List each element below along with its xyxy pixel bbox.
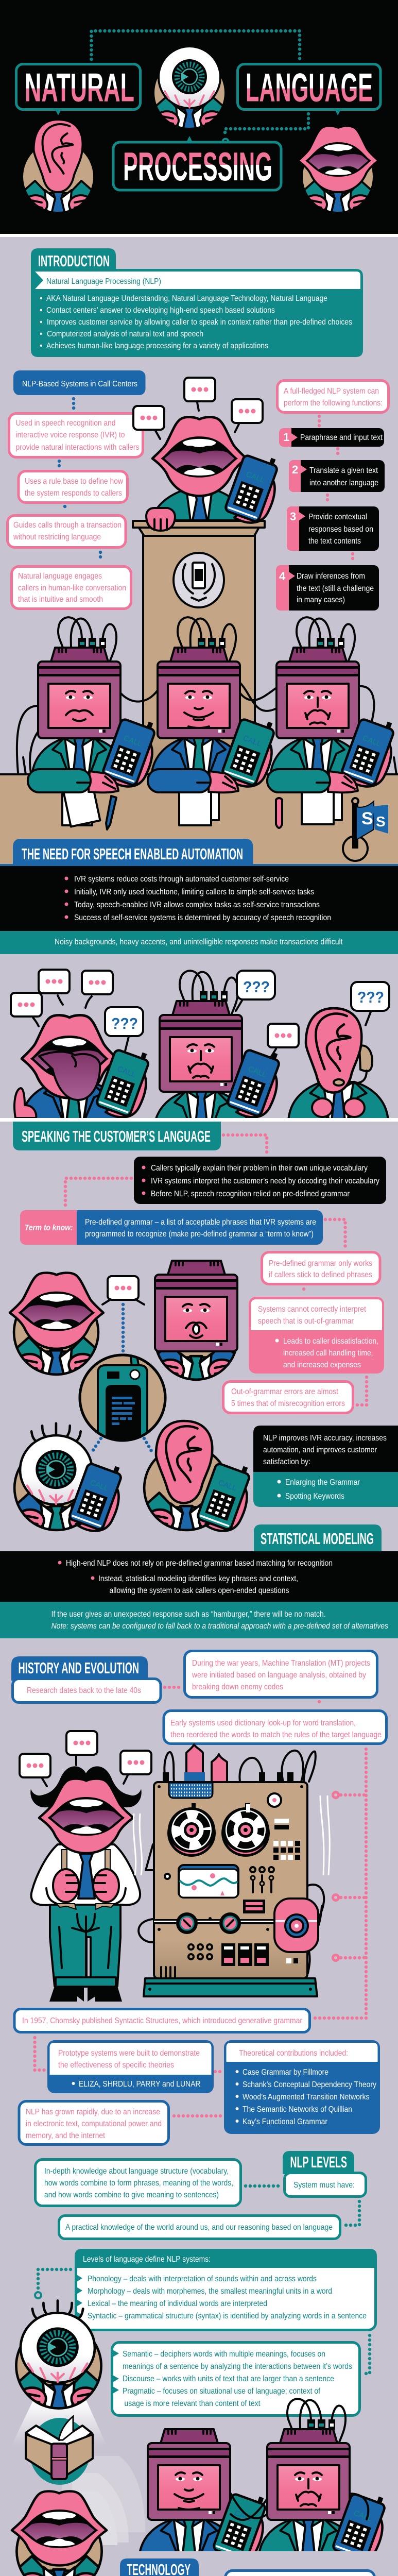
step 1: 1 <box>283 431 289 444</box>
panel: NLP-based systems in call centers: the system responds to callers <box>25 489 122 498</box>
box: levels of language <box>75 2249 377 2330</box>
panel: introduction: • <box>40 294 43 303</box>
box: Chomsky 1957 <box>14 2009 310 2032</box>
side wires <box>139 1844 324 1973</box>
icon: open book <box>26 2416 93 2485</box>
panel: NLP-based systems in call centers: provide natural interactions with callers <box>15 443 139 452</box>
panel: NLP-based systems in call centers <box>7 370 164 609</box>
controls <box>165 1793 300 1913</box>
panel: need for speech automation bullets: Success of self-service systems is determined by accuracy of speech recognition <box>74 913 331 922</box>
panel: introduction: Contact centers’ answer to developing high-end speech based solutions <box>46 306 275 315</box>
oscilloscope screen <box>179 1865 238 1897</box>
speaker body <box>152 489 247 520</box>
panel: NLP levels: how words combine to form phrases, meaning of the words, <box>44 2179 233 2188</box>
step 1: Paraphrase and input text <box>300 433 383 442</box>
heading: the need for speech enabled automation <box>13 839 253 864</box>
panel: NLP levels: and how words combine to give meaning to sentences) <box>44 2191 219 2199</box>
figure: monitor persons lower: CALL <box>353 2509 373 2523</box>
speech bubbles: history <box>20 1731 151 1786</box>
step 3 <box>287 506 379 551</box>
box: systems cannot interpret: speech that is out-of-grammar <box>258 1317 354 1326</box>
title: Natural Language Processing: NATURAL <box>25 65 134 110</box>
step 4: the text (still a challenge <box>297 584 374 593</box>
reels <box>167 1803 270 1857</box>
title: Natural Language Processing <box>16 31 380 190</box>
panel: NLP-based systems in call centers: NLP-Based Systems in Call Centers <box>22 380 137 388</box>
callout: hamburger note: If the user gives an unexpected response such as “hamburger,” there will be no match. <box>51 1610 326 1619</box>
panel: NLP improves IVR accuracy: automation, and improves customer <box>263 1446 377 1454</box>
box: levels of language: Lexical – the meaning of individual words are interpreted <box>88 2299 267 2308</box>
icon: SAS flag: S <box>361 809 373 828</box>
panel: statistical modeling bullets <box>0 1551 398 1602</box>
box: NLP has grown rapidly: memory, and the internet <box>26 2131 105 2140</box>
panel: introduction: Natural Language Processing (NLP) <box>46 277 161 286</box>
box: prototype systems <box>47 2040 214 2093</box>
box: Chomsky 1957: In 1957, Chomsky published Syntactic Structures, which introduced generative grammar <box>22 2016 303 2025</box>
icon: eye person <box>152 46 227 130</box>
box: out of grammar errors: Out-of-grammar errors are almost <box>231 1387 338 1396</box>
panel: statistical modeling bullets: High-end NLP does not rely on pre-defined grammar based matching for recognition <box>66 1559 333 1568</box>
figure: ear person <box>143 1421 258 1537</box>
figure: confused monitor: CALL <box>247 1064 268 1079</box>
panel: functions of a full NLP system <box>276 380 388 611</box>
box: levels of language: Levels of language define NLP systems: <box>83 2255 211 2264</box>
panel: NLP-based systems in call centers: Guides calls through a transaction <box>13 521 122 530</box>
speech bubble and connectors <box>93 1276 151 1451</box>
box: pre-defined grammar: Pre-defined grammar only works <box>269 1259 372 1268</box>
icon: pens <box>106 796 282 829</box>
box: levels of language: Morphology – deals with morphemes, the smallest meaningful units in a word <box>88 2287 332 2296</box>
panel: introduction: Achieves human-like language processing for a variety of applications <box>46 342 268 350</box>
figure: monitor persons lower <box>135 2399 398 2569</box>
figure: mouth with tongue <box>14 1015 158 1123</box>
panel: introduction <box>31 248 363 357</box>
box: out of grammar errors: 5 times that of misrecognition errors <box>231 1399 345 1408</box>
panel: need for speech automation bullets: Today, speech-enabled IVR allows complex tasks as self-service transactions <box>74 901 320 909</box>
figure: phone circle <box>80 1355 165 1448</box>
heading: history and evolution: HISTORY AND EVOLUTION <box>19 1659 139 1677</box>
box: pre-defined grammar <box>262 1252 380 1284</box>
machine base <box>144 1978 317 1996</box>
panel: statistical modeling bullets: allowing the system to ask callers open-ended questions <box>109 1586 289 1595</box>
icon: SAS flag: S <box>376 814 386 829</box>
box: theoretical contributions <box>224 2040 380 2134</box>
monitor person 1: CALL <box>123 734 143 749</box>
monitor person 1 <box>32 617 164 792</box>
step 1 <box>279 428 384 447</box>
step 3: Provide contextual <box>308 513 367 521</box>
box: levels of language: Phonology – deals with interpretation of sounds within and across words <box>88 2275 317 2283</box>
podium speaker scene <box>133 417 286 774</box>
box: theoretical contributions: Theoretical contributions included: <box>239 2049 348 2058</box>
callout: term to know: programmed to recognize (make pre-defined grammar a “term to know”) <box>85 1230 314 1239</box>
light beam <box>11 2401 107 2446</box>
step 3: responses based on <box>308 525 373 534</box>
title: Natural Language Processing: PROCESSING <box>123 144 272 189</box>
panel: technology <box>14 2558 387 2576</box>
panel: NLP-based systems in call centers: callers in human-like conversation <box>18 584 126 592</box>
papers and arms on table <box>28 769 358 826</box>
box: systems cannot interpret: increased call handling time, <box>283 1349 373 1358</box>
panel: NLP improves IVR accuracy: Enlarging the Grammar <box>285 1478 360 1487</box>
figure: monitor person <box>154 1261 238 1381</box>
speaker hand <box>146 508 175 531</box>
panel: introduction: • <box>40 306 43 315</box>
box: systems cannot interpret: Leads to caller dissatisfaction, <box>283 1337 378 1346</box>
panel: NLP improves IVR accuracy: satisfaction by: <box>263 1458 310 1466</box>
callout: term to know <box>20 1210 323 1245</box>
heading: the need for speech enabled automation: THE NEED FOR SPEECH ENABLED AUTOMATION <box>22 845 243 863</box>
panel: functions of a full NLP system: perform the following functions: <box>284 399 383 408</box>
panel: history and evolution: During the war years, Machine Translation (MT) projects <box>192 1659 370 1668</box>
figure: mouth person lower <box>12 2492 107 2576</box>
box: theoretical contributions: The Semantic Networks of Quillian <box>243 2105 352 2114</box>
step 4: 4 <box>279 570 286 583</box>
box: theoretical contributions: Kay’s Functional Grammar <box>243 2117 328 2126</box>
connectors: timeline dots <box>314 1749 366 2018</box>
panel: NLP levels: System must have: <box>293 2181 355 2190</box>
box: out of grammar errors <box>223 1382 353 1413</box>
figure: monitor persons lower: CALL <box>233 2509 254 2523</box>
figure: eye person <box>15 2300 102 2410</box>
panel: history and evolution: were initiated based on language analysis, obtained by <box>192 1671 366 1680</box>
icon: ear person <box>21 120 95 214</box>
panel: history and evolution: Research dates back to the late 40s <box>27 1686 141 1695</box>
figure: mouth person <box>10 1273 103 1376</box>
box: systems cannot interpret: Systems cannot correctly interpret <box>258 1305 366 1314</box>
icon: SAS flag <box>343 798 388 861</box>
monitor person 3: CALL <box>361 734 382 749</box>
panel: introduction: AKA Natural Language Understanding, Natural Language Technology, Natural Language <box>46 294 327 303</box>
monitor person 2 <box>151 617 283 792</box>
box: prototype systems: the effectiveness of specific theories <box>58 2061 174 2070</box>
box: NLP has grown rapidly <box>19 2101 169 2144</box>
box: systems cannot interpret <box>249 1297 384 1374</box>
box: theoretical contributions: Schank’s Conceptual Dependency Theory <box>243 2080 376 2089</box>
step 4: in many cases) <box>297 596 345 604</box>
figure: confused monitor <box>154 971 288 1128</box>
box: theoretical contributions: Wood’s Augmented Transition Networks <box>243 2093 370 2102</box>
panel: NLP-based systems in call centers: that is intuitive and smooth <box>18 595 103 604</box>
box: prototype systems: ELIZA, SHRDLU, PARRY and LUNAR <box>79 2080 201 2089</box>
box: semantic discourse pragmatic <box>112 2342 359 2415</box>
heading: introduction: INTRODUCTION <box>38 252 110 270</box>
panel: need for speech automation bullets <box>0 866 398 931</box>
callout: term to know: Term to know: <box>25 1224 73 1232</box>
table <box>0 774 398 865</box>
machine wiring and towers <box>163 1744 316 1783</box>
box: semantic discourse pragmatic: Discourse – works with units of text that are larger than a sentence <box>123 2375 334 2383</box>
callout: noisy backgrounds <box>0 931 398 954</box>
box: semantic discourse pragmatic: Semantic – deciphers words with multiple meanings, focuses on <box>123 2350 325 2359</box>
speech bubbles: confusion: ??? <box>111 1014 138 1032</box>
figure: ear with headset <box>288 1008 388 1119</box>
speaker mouth <box>152 417 247 496</box>
box: systems cannot interpret: and increased expenses <box>283 1361 361 1369</box>
step 2: 2 <box>292 463 298 476</box>
lower buttons <box>158 1917 298 1978</box>
heading: speaking the customer's language: SPEAKING THE CUSTOMER’S LANGUAGE <box>22 1127 211 1145</box>
wires between monitors <box>17 683 374 773</box>
speech bubbles: confusion: ??? <box>357 988 384 1006</box>
panel: introduction: Computerized analysis of natural text and speech <box>47 330 203 338</box>
figure: mouth with tongue: CALL <box>116 1064 137 1079</box>
panel: NLP improves IVR accuracy: Spotting Keywords <box>285 1492 344 1501</box>
pink speaker <box>274 1899 318 1952</box>
speech bubbles: confusion <box>11 970 389 1057</box>
box: NLP has grown rapidly: NLP has grown rapidly, due to an increase <box>26 2108 160 2116</box>
panel: NLP-based systems in call centers: Uses a rule base to define how <box>25 477 123 486</box>
heading: speaking the customer's language <box>13 1122 221 1150</box>
podium <box>133 521 265 774</box>
panel: NLP levels: A practical knowledge of the world around us, and our reasoning based on language <box>65 2223 333 2232</box>
step 3: 3 <box>290 510 296 523</box>
panel: introduction: Improves customer service by allowing caller to speak in context rather than pre-defined choices <box>47 318 352 327</box>
box: semantic discourse pragmatic: meanings of a sentence by analyzing the interactions between it’s words <box>123 2362 352 2371</box>
panel: NLP improves IVR accuracy <box>253 1426 398 1507</box>
step 3: the text contents <box>308 537 361 546</box>
panel: callers vocabulary: Before NLP, speech recognition relied on pre-defined grammar <box>151 1190 350 1198</box>
podium emblem <box>174 553 224 607</box>
step 4: Draw inferences from <box>297 572 365 581</box>
callout: hamburger note <box>0 1602 398 1638</box>
speech bubbles <box>133 378 263 439</box>
panel: callers vocabulary <box>134 1157 386 1204</box>
panel: NLP-based systems in call centers: Natural language engages <box>18 572 102 581</box>
monitor person 2: CALL <box>242 734 263 749</box>
box: semantic discourse pragmatic: usage is more relevant than content of text <box>125 2399 261 2408</box>
speaker phone <box>223 449 286 529</box>
header band <box>0 0 398 234</box>
panel: history and evolution: Early systems used dictionary look-up for word translation, <box>170 1719 356 1727</box>
panel: need for speech automation bullets: IVR systems reduce costs through automated customer self-service <box>74 875 289 884</box>
speech bubbles: confusion: ??? <box>243 978 270 996</box>
panel: NLP-based systems in call centers: Used in speech recognition and <box>15 419 115 428</box>
callout: noisy backgrounds: Noisy backgrounds, heavy accents, and unintelligible responses make transactions difficult <box>55 938 343 946</box>
sound waves from mouth <box>62 2456 145 2545</box>
step 2 <box>289 460 385 492</box>
figure: ear person: CALL <box>217 1478 238 1493</box>
box: NLP has grown rapidly: in electronic text, computational power and <box>26 2120 162 2128</box>
panel: history and evolution <box>11 1651 386 1743</box>
panel: NLP-based systems in call centers: interactive voice response (IVR) to <box>15 431 125 439</box>
figure: eye person: CALL <box>89 1478 110 1493</box>
box: prototype systems: Prototype systems were built to demonstrate <box>58 2049 200 2058</box>
panel: statistical modeling bullets: Instead, statistical modeling identifies key phrases and context, <box>98 1574 298 1583</box>
box: semantic discourse pragmatic: Pragmatic – focuses on situational use of language; context of <box>123 2387 320 2396</box>
heading: statistical modeling <box>254 1524 382 1551</box>
panel: NLP levels: In-depth knowledge about language structure (vocabulary, <box>44 2167 229 2176</box>
box: pre-defined grammar: if callers stick to defined phrases <box>269 1270 372 1279</box>
panel: introduction: • <box>40 330 43 338</box>
panel: introduction: • <box>40 318 43 327</box>
panel: need for speech automation bullets: Initially, IVR only used touchtone, limiting callers to simple self-service tasks <box>74 888 314 896</box>
panel: functions of a full NLP system: A full-fledged NLP system can <box>284 387 379 396</box>
box: theoretical contributions: Case Grammar by Fillmore <box>243 2068 328 2077</box>
icon: mouth person <box>298 126 378 214</box>
tape stripe and dials <box>154 1912 278 1934</box>
step 4 <box>276 565 379 611</box>
figure: tape machine <box>133 1744 330 1996</box>
callout: term to know: Pre-defined grammar – a list of acceptable phrases that IVR systems are <box>85 1218 316 1227</box>
panel: history and evolution: breaking down enemy codes <box>192 1683 283 1691</box>
figure: man with moustache hair <box>30 1766 142 2002</box>
panel: NLP levels <box>35 2151 370 2374</box>
speaker phone: CALL <box>245 470 266 485</box>
figure: eye person <box>13 1423 130 1537</box>
monitor person 3 <box>270 617 398 792</box>
step 2: into another language <box>309 479 378 487</box>
panel: callers vocabulary: Callers typically explain their problem in their own unique vocabulary <box>151 1164 368 1173</box>
heading: NLP levels: NLP LEVELS <box>290 2153 347 2171</box>
panel: NLP-based systems in call centers: without restricting language <box>13 533 101 541</box>
step 2: Translate a given text <box>309 466 378 475</box>
panel: introduction: • <box>40 342 43 350</box>
